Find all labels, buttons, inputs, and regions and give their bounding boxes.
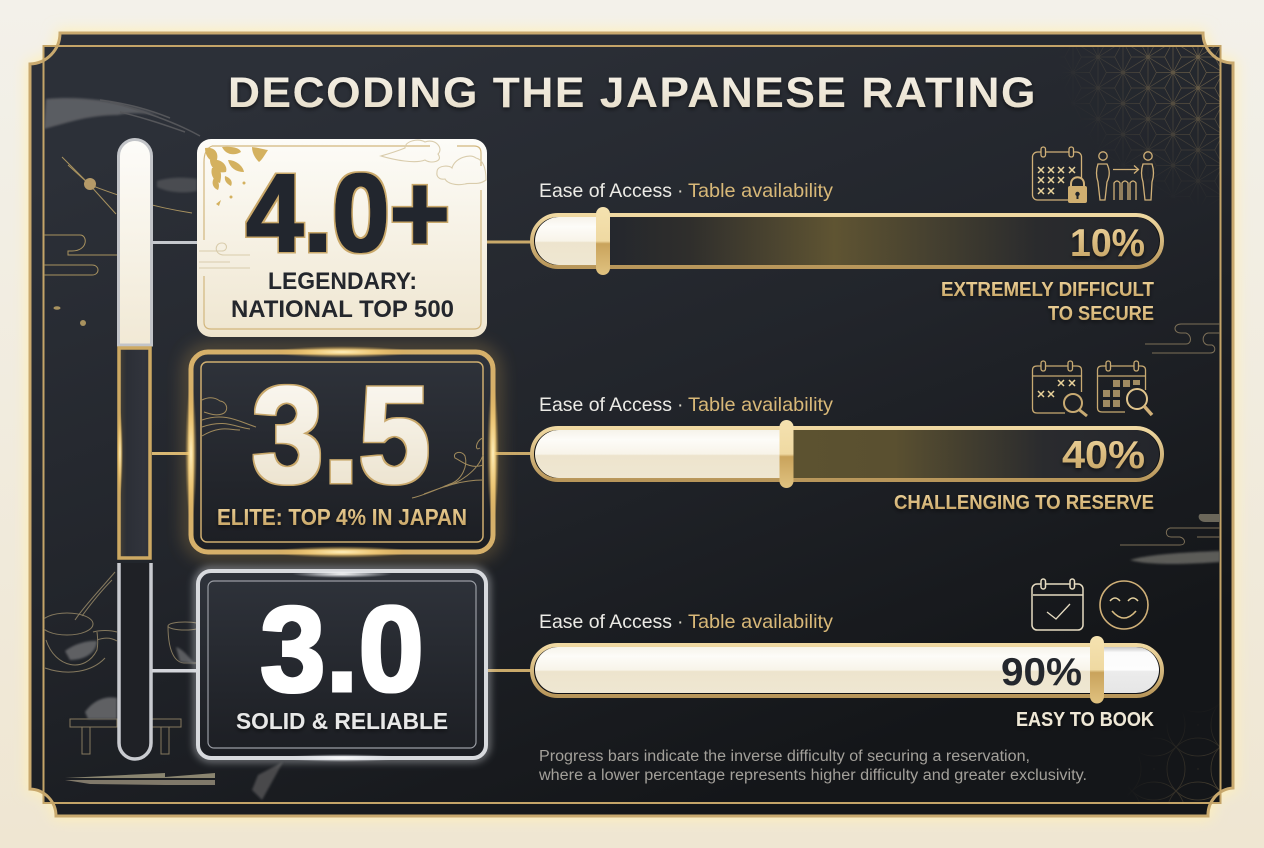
decorative clouds and brush, right side [1120, 324, 1220, 564]
connectors from scale to cards [152, 240, 532, 672]
row 1 status label [941, 279, 1154, 325]
row 1 caption: Ease of Access [539, 180, 672, 202]
rating label: LEGENDARY: [268, 268, 417, 295]
scale segment: legendary [118, 140, 152, 345]
bar handle [1090, 636, 1104, 704]
row 2 status label: CHALLENGING TO RESERVE [894, 492, 1154, 514]
rating number: 3.5 [252, 359, 430, 512]
row 3 caption: Table availability [688, 611, 833, 633]
bar value: 90% [1001, 651, 1082, 694]
progress bar: 90% [532, 636, 1162, 704]
rating number: 3.0 [260, 581, 424, 717]
row 3 caption: Ease of Access [539, 611, 672, 633]
rating label [231, 268, 454, 323]
bar value: 40% [1062, 434, 1145, 477]
footnote [538, 748, 1087, 784]
panel: card 3.0 [197, 570, 487, 762]
icon: clouds [199, 140, 486, 268]
highlights on card border [117, 346, 499, 558]
icon: people queue [1096, 152, 1154, 200]
row 1 caption: · [677, 180, 684, 202]
icon: calendar grid with magnifier [1098, 361, 1152, 415]
rating label: NATIONAL TOP 500 [231, 296, 454, 323]
row 3 caption: · [677, 611, 684, 633]
bar handle [780, 420, 794, 488]
rating label: ELITE: TOP 4% IN JAPAN [217, 504, 467, 530]
title: DECODING THE JAPANESE RATING [228, 69, 1037, 117]
panel: card 4.0+ [197, 139, 487, 337]
progress bar: 10% [532, 207, 1162, 275]
icon: smiley [1100, 581, 1148, 629]
panel: card 3.5 [117, 346, 499, 558]
bar handle [596, 207, 610, 275]
row 1 caption [539, 180, 833, 202]
bar value: 10% [1070, 222, 1145, 265]
decorative asanoha pattern top right [1074, 47, 1220, 194]
rating number: 4.0+ [246, 152, 450, 275]
row 1 status label: EXTREMELY DIFFICULT [941, 279, 1154, 301]
row 2 caption: Table availability [688, 394, 833, 416]
ornament: wave swirls [202, 398, 483, 498]
row 3 status label: EASY TO BOOK [1016, 709, 1154, 731]
highlights on card border [282, 570, 402, 762]
row 2 caption: · [677, 394, 684, 416]
icon: calendar with magnifier [1032, 361, 1087, 416]
icon: gold leaves [205, 147, 268, 206]
decorative circle pattern bottom right [1138, 714, 1220, 802]
row 2 caption: Ease of Access [539, 394, 672, 416]
decorative ink brush and clouds, upper left [44, 98, 200, 326]
icon: locked calendar [1032, 147, 1087, 203]
scale segment: solid [119, 563, 151, 759]
row 2 caption [539, 394, 833, 416]
scale segment: elite [119, 348, 150, 558]
row 3 caption [539, 611, 833, 633]
rating label: SOLID & RELIABLE [236, 708, 448, 734]
icon: calendar with check [1032, 579, 1083, 630]
footnote: where a lower percentage represents higher difficulty and greater exclusivity. [538, 767, 1087, 784]
footnote: Progress bars indicate the inverse difficulty of securing a reservation, [539, 748, 1030, 765]
decorative tea bowls, table and chopsticks, lower left [41, 572, 283, 800]
row 1 caption: Table availability [688, 180, 833, 202]
row 1 status label: TO SECURE [1048, 303, 1154, 325]
vertical rating scale [118, 140, 152, 759]
progress bar: 40% [532, 420, 1162, 488]
